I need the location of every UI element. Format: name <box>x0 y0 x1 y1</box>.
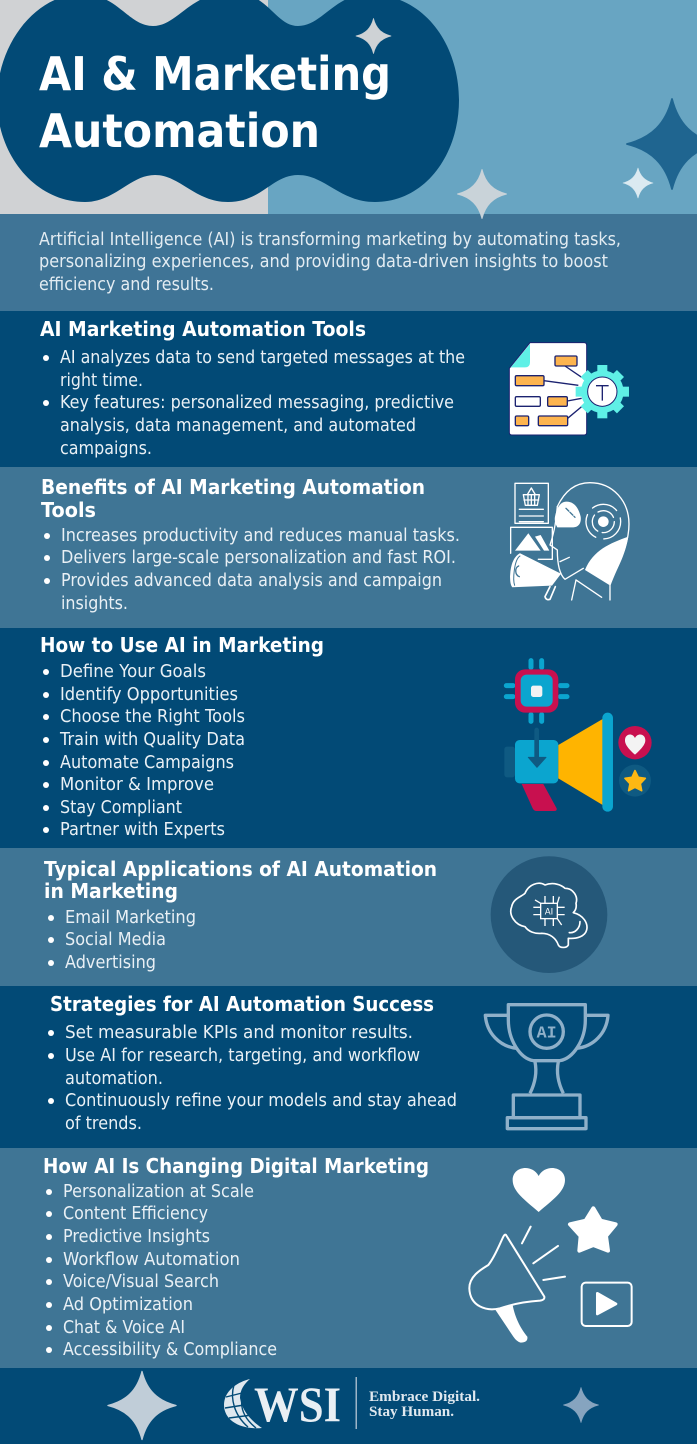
panel: AI marketing automation tools <box>0 311 697 467</box>
header panel <box>0 0 697 214</box>
bullet list: Identify Opportunities <box>60 685 238 705</box>
logo: WSI: Stay Human. <box>369 1404 454 1420</box>
bullet list: Key features: personalized messaging, predictive <box>60 393 454 413</box>
icon: sparkle small light <box>623 168 653 198</box>
bullet list: Partner with Experts <box>60 820 225 840</box>
bullet list: Social Media <box>65 930 166 950</box>
bullet list: Increases productivity and reduces manual tasks. <box>61 526 460 546</box>
icon: sparkle top <box>356 18 391 54</box>
bullet list: Automate Campaigns <box>60 753 234 773</box>
bullet list: Choose the Right Tools <box>60 707 245 727</box>
bullet list: Personalization at Scale <box>63 1182 254 1202</box>
bullet list: Stay Compliant <box>60 798 182 818</box>
heading: How AI Is Changing Digital Marketing <box>43 1154 429 1178</box>
bullet list: Voice/Visual Search <box>63 1272 219 1292</box>
logo: WSI <box>224 1376 480 1432</box>
icon: AI brain: AI <box>545 908 553 918</box>
logo: WSI: WSI <box>254 1376 341 1432</box>
heading: Typical Applications of AI Automation <box>44 857 437 881</box>
panel: footer <box>0 1368 697 1444</box>
bullet list <box>44 526 460 614</box>
heading: AI Marketing Automation Tools <box>40 317 366 341</box>
panel: how AI is changing digital marketing <box>0 1148 697 1368</box>
icon: footer sparkle left <box>108 1372 176 1440</box>
bullet list: Use AI for research, targeting, and workflow <box>65 1046 420 1066</box>
panel: typical applications <box>0 848 697 986</box>
panel: intro: personalizing experiences, and providing data-driven insights to boost <box>39 252 608 272</box>
bullet list: Set measurable KPIs and monitor results. <box>65 1023 413 1043</box>
panel: intro: Artificial Intelligence (AI) is transforming marketing by automating tasks, <box>39 230 621 250</box>
icon: sparkle large dark <box>627 99 697 189</box>
heading: Strategies for AI Automation Success <box>50 992 434 1016</box>
panel: how to use AI <box>0 628 697 848</box>
icon: globe <box>224 1379 262 1428</box>
heading: Benefits of AI Marketing Automation <box>41 475 425 499</box>
bullet list: Chat & Voice AI <box>63 1318 185 1338</box>
heading <box>44 857 437 903</box>
icon: chip and megaphone <box>504 661 652 812</box>
bullet list: of trends. <box>65 1114 142 1134</box>
bullet list <box>48 908 196 973</box>
title <box>39 47 391 158</box>
icon: AI head with megaphone <box>511 483 629 600</box>
bullet list: Delivers large-scale personalization and fast ROI. <box>61 548 456 568</box>
bullet list: Content Efficiency <box>63 1204 208 1224</box>
panel: intro: efficiency and results. <box>39 275 214 295</box>
icon: footer sparkle right <box>564 1388 598 1422</box>
bullet list <box>43 662 245 840</box>
bullet list <box>43 348 465 459</box>
bullet list: Train with Quality Data <box>59 730 245 750</box>
bullet list: Advertising <box>65 953 156 973</box>
icon: AI brain <box>491 856 607 973</box>
bullet list: Monitor & Improve <box>60 775 214 795</box>
title: AI & Marketing <box>39 47 391 101</box>
panel: strategies <box>0 986 697 1148</box>
bullet list: AI analyzes data to send targeted messages at the <box>60 348 465 368</box>
bullet list: automation. <box>65 1069 163 1089</box>
bullet list: analysis, data management, and automated <box>60 416 416 436</box>
bullet list: insights. <box>61 594 128 614</box>
icon: AI trophy <box>485 1005 608 1129</box>
bullet list: Predictive Insights <box>63 1227 210 1247</box>
panel: intro <box>0 214 697 311</box>
bullet list: Continuously refine your models and stay ahead <box>65 1091 457 1111</box>
heading: How to Use AI in Marketing <box>40 633 324 657</box>
bullet list: Ad Optimization <box>63 1295 193 1315</box>
icon: AI trophy: AI <box>537 1025 557 1044</box>
logo: WSI: Embrace Digital. <box>369 1389 480 1405</box>
bullet list: Define Your Goals <box>60 662 206 682</box>
bullet list: Provides advanced data analysis and campaign <box>61 571 442 591</box>
heading: in Marketing <box>44 879 178 903</box>
icon: document and gear <box>509 343 629 435</box>
panel: benefits <box>0 467 697 628</box>
bullet list: Workflow Automation <box>63 1250 240 1270</box>
icon: megaphone with heart, star and video <box>469 1168 632 1343</box>
bullet list: Accessibility & Compliance <box>63 1340 277 1360</box>
icon: sparkle medium grey <box>458 170 506 218</box>
heading: Tools <box>41 498 96 522</box>
bullet list: Email Marketing <box>65 908 196 928</box>
bullet list: campaigns. <box>60 439 152 459</box>
bullet list: right time. <box>60 371 143 391</box>
title blob <box>0 0 459 202</box>
bullet list <box>46 1182 277 1360</box>
heading <box>41 475 425 522</box>
bullet list <box>48 1023 457 1134</box>
title: Automation <box>39 104 320 158</box>
